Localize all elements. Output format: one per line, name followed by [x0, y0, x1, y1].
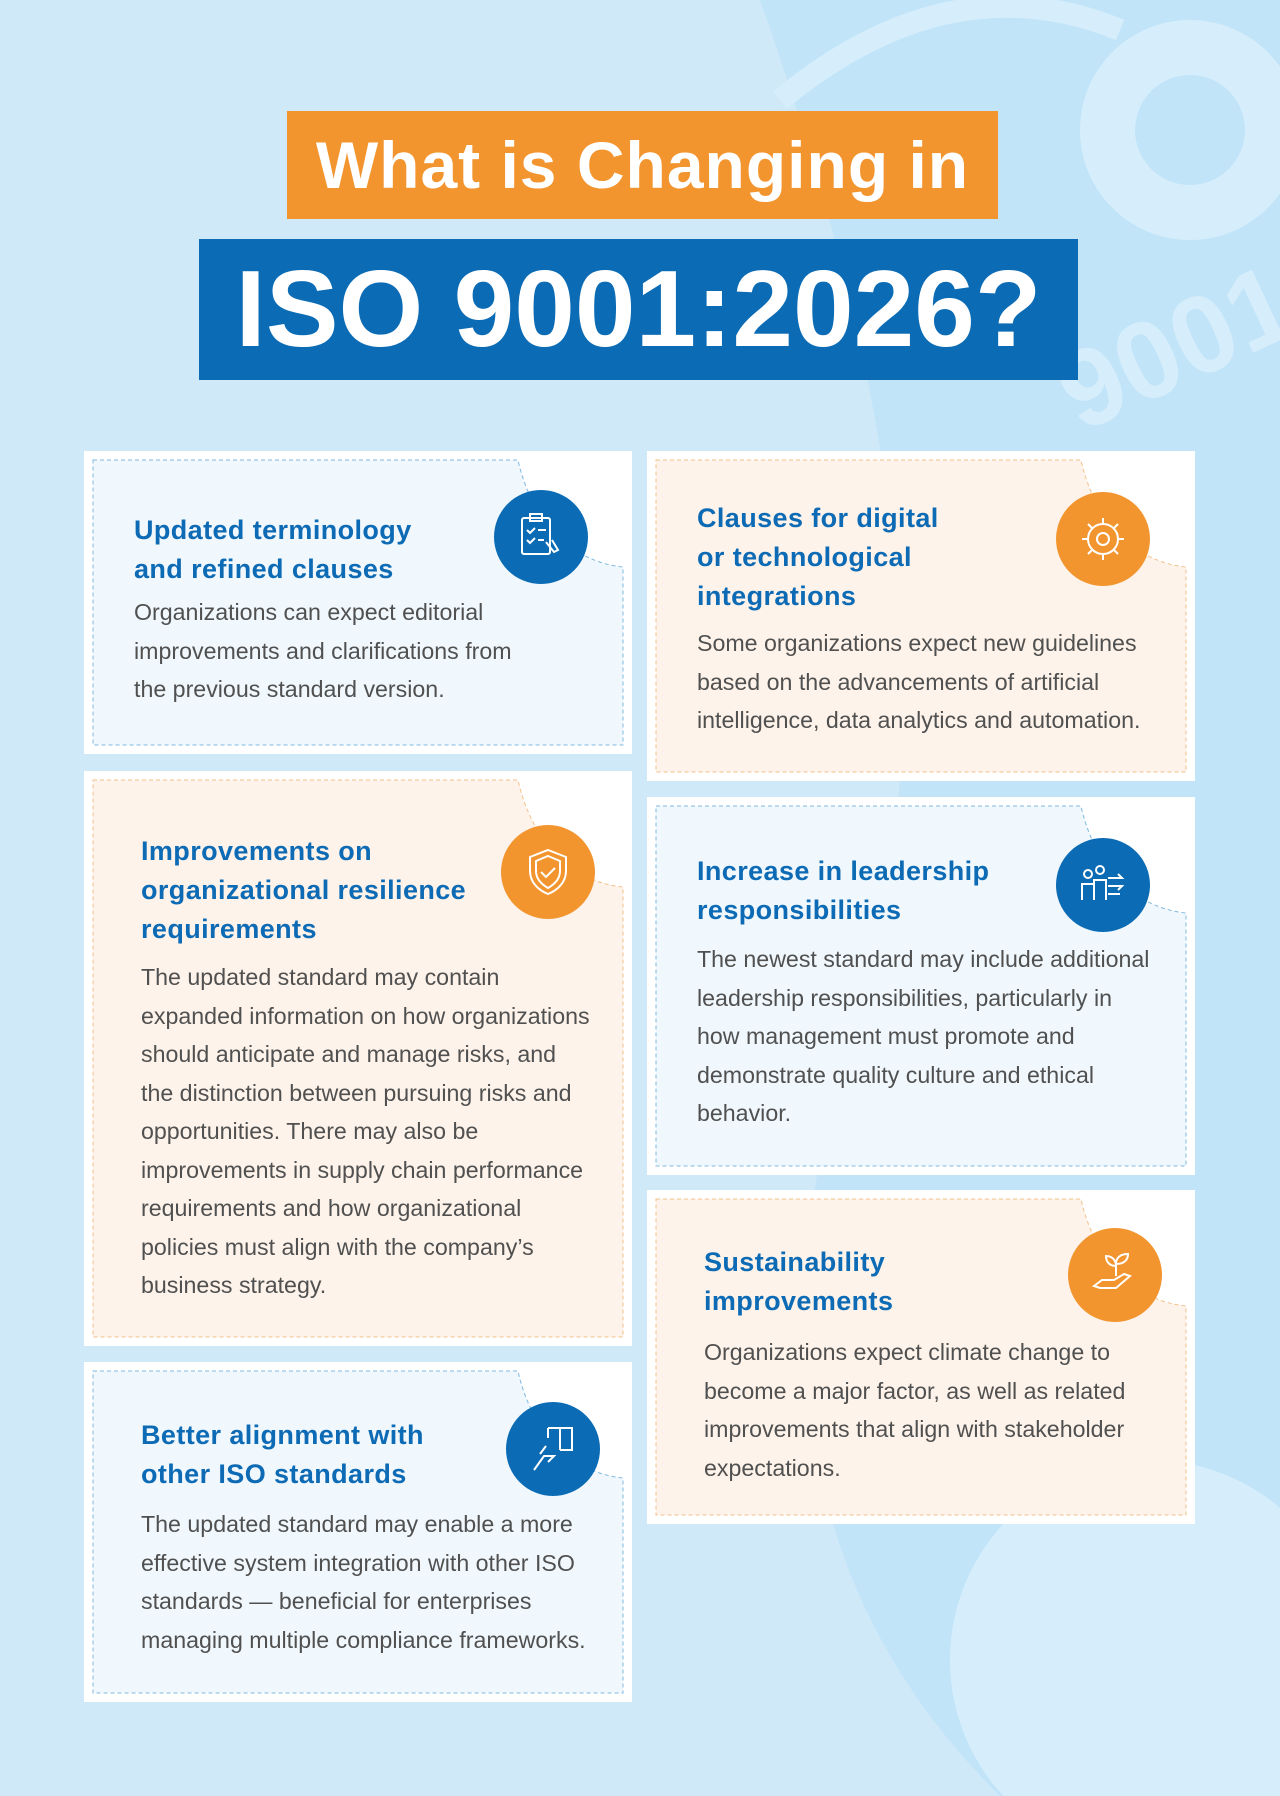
panel: sustainability: [647, 1190, 1195, 1524]
text: improvements in supply chain performance: [141, 1156, 583, 1182]
heading: Clauses for digital: [697, 503, 939, 533]
heading: Improvements on: [141, 836, 372, 866]
text: behavior.: [697, 1100, 791, 1126]
heading: Better alignment with: [141, 1420, 424, 1450]
text: the distinction between pursuing risks and: [141, 1080, 572, 1106]
text: [704, 1339, 1125, 1481]
text: business strategy.: [141, 1272, 326, 1298]
text: leadership responsibilities, particularly in: [697, 984, 1112, 1010]
panel: updated terminology: [84, 451, 632, 754]
heading: Updated terminology: [134, 515, 412, 545]
text: intelligence, data analytics and automation.: [697, 707, 1140, 733]
text: [697, 946, 1149, 1126]
text: the previous standard version.: [134, 676, 445, 702]
text: expectations.: [704, 1454, 841, 1480]
text: should anticipate and manage risks, and: [141, 1041, 556, 1067]
text: [697, 630, 1140, 733]
text: demonstrate quality culture and ethical: [697, 1062, 1094, 1088]
heading: [141, 836, 466, 944]
icon: clipboard: [494, 490, 588, 584]
title: orange banner: What is Changing in: [316, 128, 969, 202]
text: expanded information on how organizations: [141, 1002, 590, 1028]
text: based on the advancements of artificial: [697, 668, 1099, 694]
heading: [141, 1420, 424, 1489]
icon: AI brain: [1056, 492, 1150, 586]
panel: ISO alignment: [84, 1362, 632, 1702]
heading: and refined clauses: [134, 554, 394, 584]
heading: Increase in leadership: [697, 856, 989, 886]
text: improvements that align with stakeholder: [704, 1416, 1124, 1442]
heading: integrations: [697, 581, 856, 611]
panel: organizational resilience: [84, 771, 632, 1346]
heading: [697, 856, 989, 925]
panel: digital integrations: [647, 451, 1195, 781]
text: [141, 964, 590, 1298]
text: standards — beneficial for enterprises: [141, 1588, 532, 1614]
text: Organizations can expect editorial: [134, 599, 483, 625]
text: managing multiple compliance frameworks.: [141, 1626, 586, 1652]
icon: hand with plant: [1068, 1228, 1162, 1322]
text: The updated standard may enable a more: [141, 1511, 573, 1537]
heading: responsibilities: [697, 895, 901, 925]
heading: improvements: [704, 1286, 893, 1316]
text: policies must align with the company’s: [141, 1234, 534, 1260]
text: how management must promote and: [697, 1023, 1075, 1049]
icon: leader: [1056, 838, 1150, 932]
icon: puzzle: [506, 1402, 600, 1496]
text: Some organizations expect new guidelines: [697, 630, 1137, 656]
title: orange banner: [287, 111, 998, 219]
heading: or technological: [697, 542, 912, 572]
heading: other ISO standards: [141, 1459, 407, 1489]
text: [141, 1511, 586, 1653]
text: become a major factor, as well as related: [704, 1378, 1125, 1404]
heading: [704, 1247, 893, 1316]
heading: organizational resilience: [141, 875, 466, 905]
text: [134, 599, 512, 702]
icon: shield: [501, 825, 595, 919]
text: Organizations expect climate change to: [704, 1339, 1110, 1365]
heading: [134, 515, 412, 584]
text: requirements and how organizational: [141, 1195, 521, 1221]
heading: Sustainability: [704, 1247, 885, 1277]
title: blue banner: ISO 9001:2026?: [236, 248, 1041, 370]
text: The updated standard may contain: [141, 964, 499, 990]
text: effective system integration with other ISO: [141, 1550, 575, 1576]
heading: [697, 503, 939, 611]
panel: leadership: [647, 797, 1195, 1175]
text: improvements and clarifications from: [134, 638, 512, 664]
heading: requirements: [141, 914, 317, 944]
text: opportunities. There may also be: [141, 1118, 478, 1144]
text: The newest standard may include additional: [697, 946, 1149, 972]
